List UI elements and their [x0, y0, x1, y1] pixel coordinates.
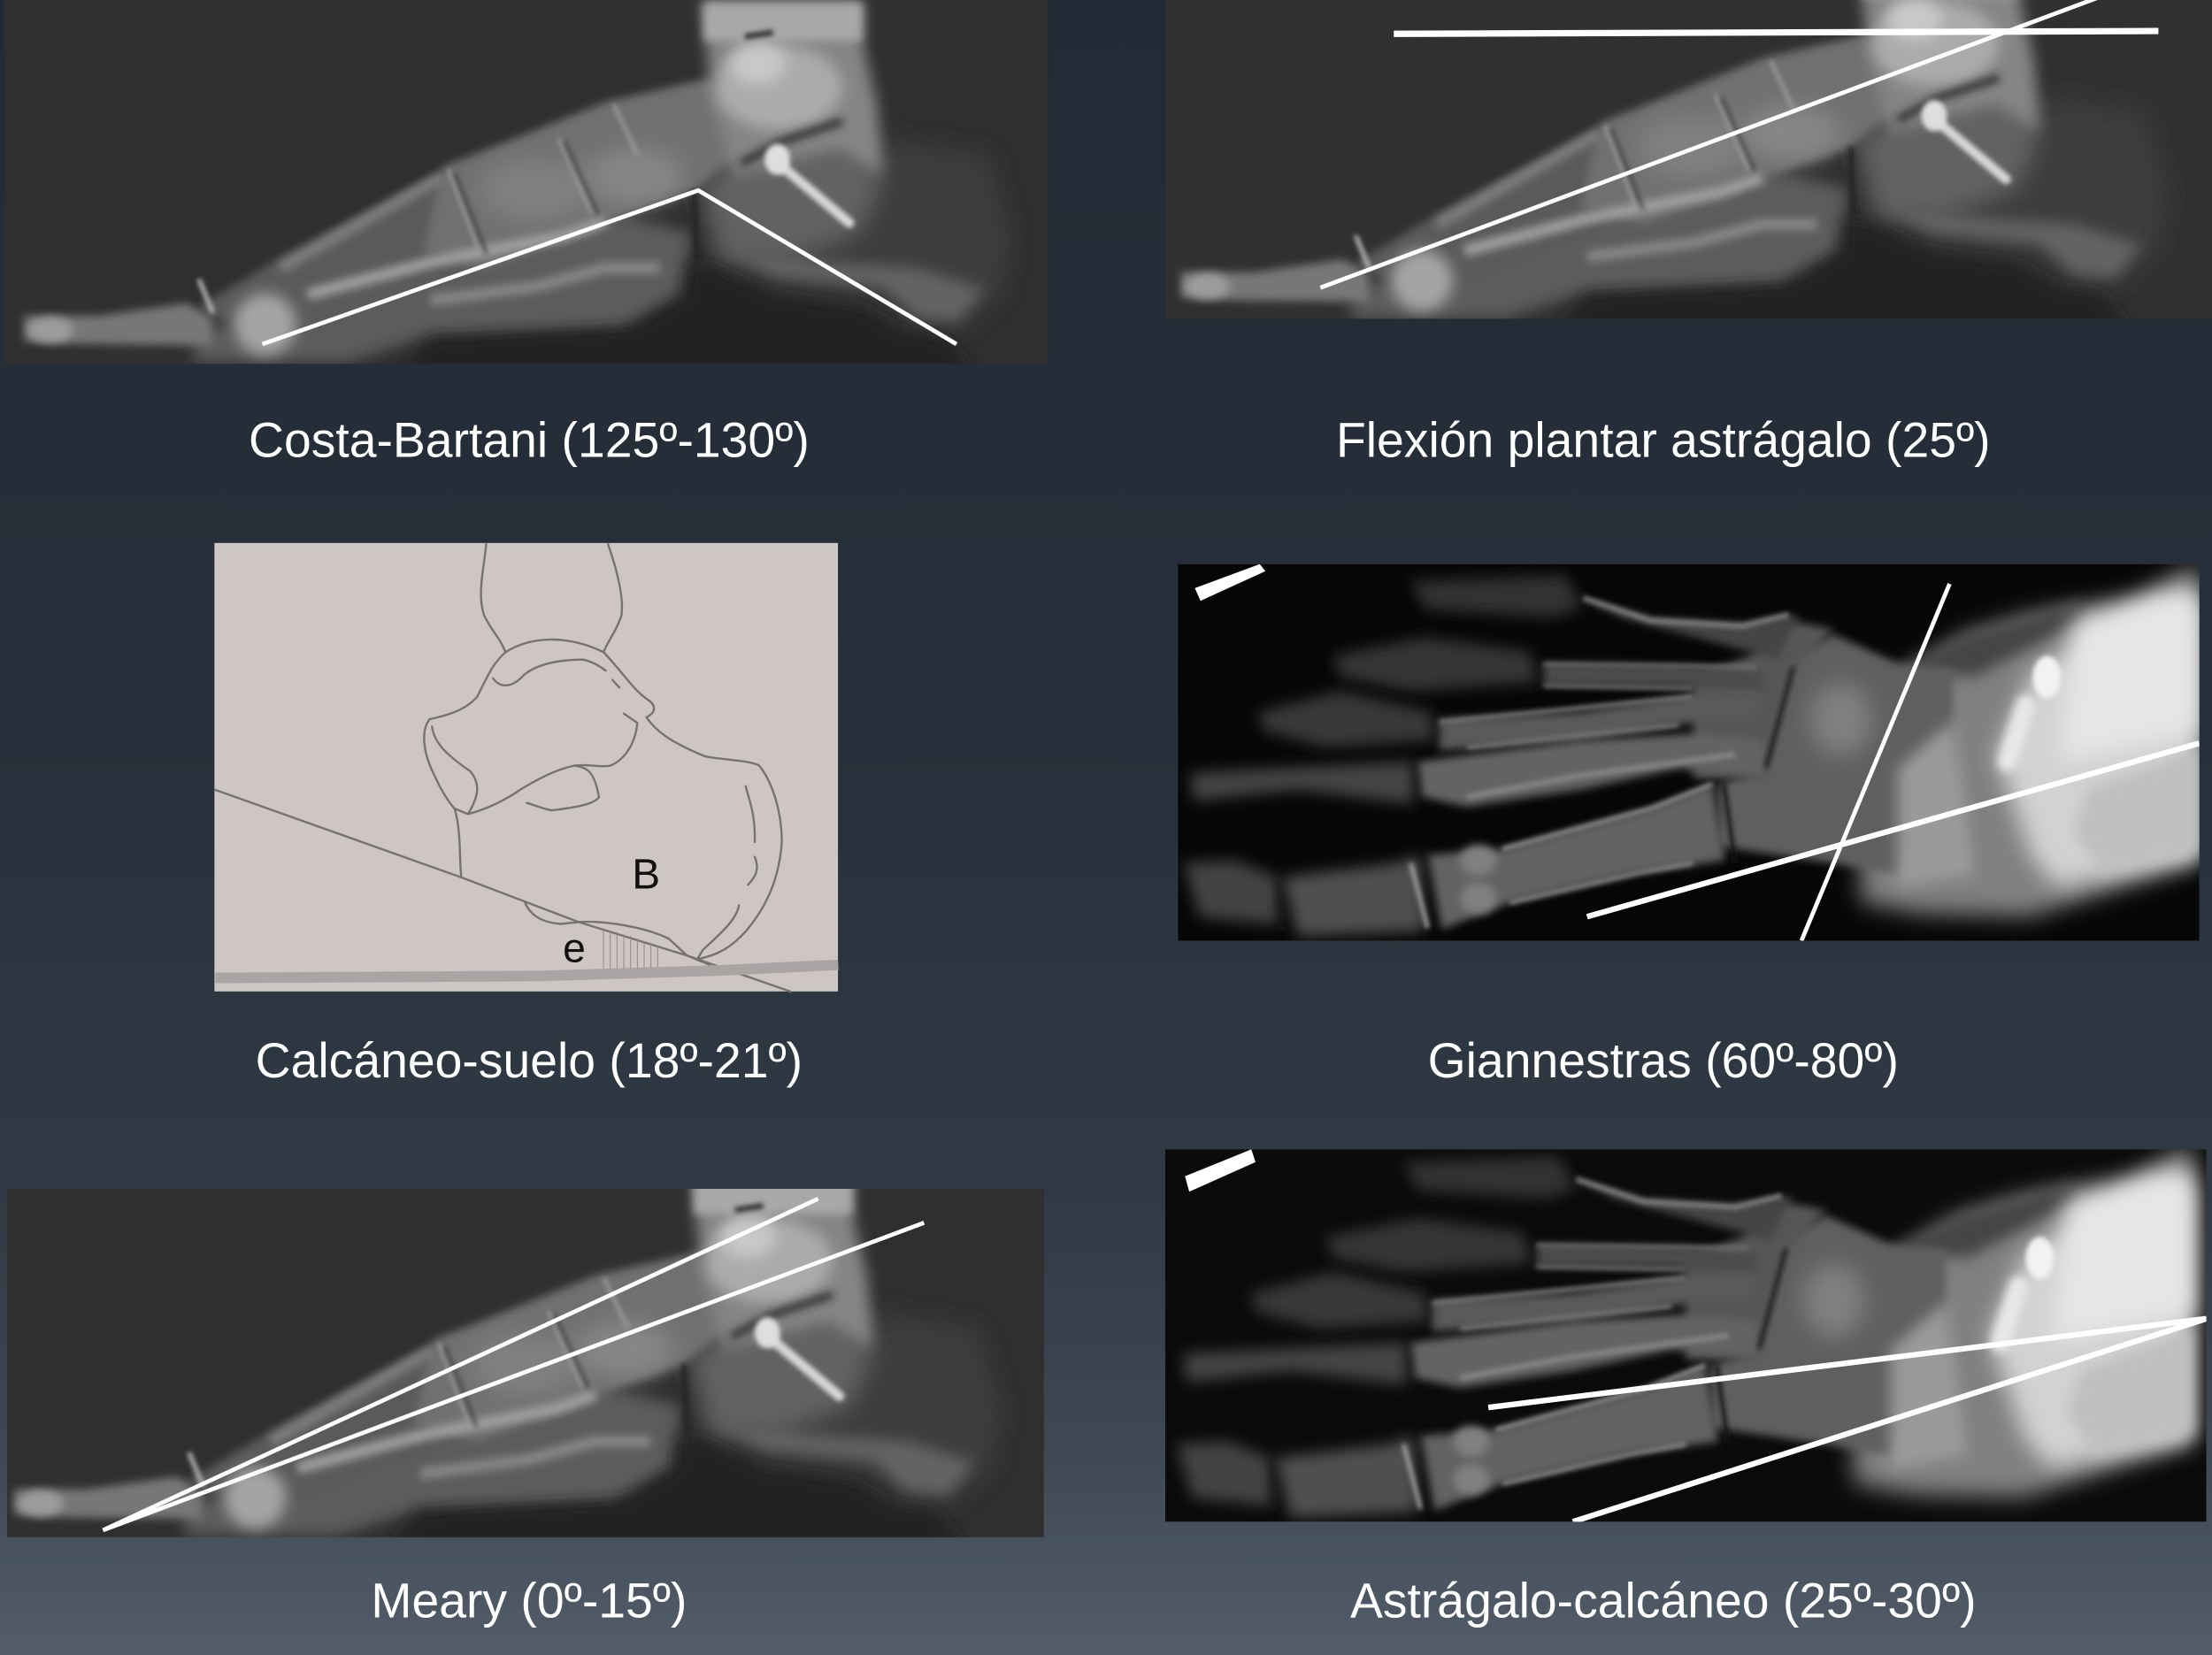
panel: Flexión plantar astrágalo radiograph: [1165, 0, 2212, 330]
scale marker: [1194, 564, 1265, 601]
label B: B: [632, 851, 660, 898]
angle lines: [1801, 584, 1949, 940]
angle lines: [1488, 1319, 2207, 1521]
foot x-ray lateral view: [24, 0, 1011, 374]
panel: Costa-Bartani radiograph: [4, 0, 1048, 374]
foot x-ray lateral view: [1181, 0, 2169, 330]
caption: Costa-Bartani: Costa-Bartani (125º-130º): [249, 413, 810, 468]
angle lines: [103, 1199, 924, 1530]
foot x-ray dorsal view: [1184, 562, 2200, 937]
caption: Calcáneo-suelo: Calcáneo-suelo (18º-21º): [256, 1033, 803, 1088]
scale marker: [1185, 1149, 1256, 1191]
panel: Astrágalo-calcáneo radiograph: [1165, 1142, 2207, 1521]
calcaneus line drawing: [215, 544, 838, 992]
label e: e: [563, 924, 586, 970]
caption: Flexión plantar astrágalo: Flexión plantar astrágalo (25º): [1336, 413, 1991, 468]
caption: Giannestras: Giannestras (60º-80º): [1428, 1033, 1899, 1088]
foot x-ray dorsal view: [1177, 1142, 2193, 1518]
panel: Meary radiograph: [7, 1174, 1044, 1547]
horizontal line: [1394, 31, 2158, 34]
caption: Meary: Meary (0º-15º): [371, 1574, 687, 1628]
panel: Calcáneo-suelo drawing: [214, 543, 838, 992]
panel: Giannestras radiograph: [1178, 562, 2200, 940]
talus axis line: [1320, 0, 2099, 287]
foot x-ray lateral view: [14, 1174, 1002, 1547]
caption: Astrágalo-calcáneo: Astrágalo-calcáneo (25º-30º): [1350, 1574, 1977, 1628]
angle lines: [263, 190, 956, 344]
